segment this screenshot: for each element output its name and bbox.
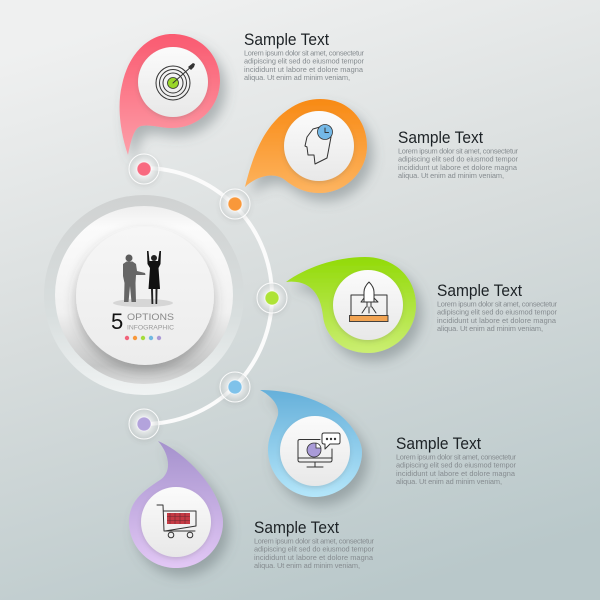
- text block: option 1: aliqua. Ut enim ad minim veniam,: [244, 73, 350, 82]
- icon: shopping cart: [157, 505, 196, 538]
- text block: option 1: Sample Text: [244, 30, 329, 49]
- five colour dots: [125, 336, 161, 340]
- node: green: [257, 283, 287, 313]
- text block: option 2: aliqua. Ut enim ad minim veniam,: [398, 171, 504, 180]
- central circle hub: [44, 195, 244, 395]
- text block: option 2: Sample Text: [398, 128, 483, 147]
- text block: option 1: incididunt ut labore et dolore magna: [244, 65, 364, 74]
- number 5: 5: [111, 309, 123, 334]
- panel: green pin rocket: [286, 257, 416, 353]
- node: red: [129, 154, 159, 184]
- text block: option 5: adipiscing elit sed do eiusmod tempor: [254, 544, 375, 554]
- text block: option 4: [396, 434, 517, 486]
- text block: option 2: adipiscing elit sed do eiusmod tempor: [398, 154, 519, 164]
- text block: option 4: incididunt ut labore et dolore magna: [396, 469, 516, 478]
- text block: option 5: Sample Text: [254, 518, 339, 537]
- people silhouettes: [113, 251, 173, 307]
- text block: option 2: [398, 128, 519, 180]
- panel: purple pin cart: [129, 441, 223, 568]
- text block: option 1: adipiscing elit sed do eiusmod tempor: [244, 56, 365, 66]
- text block: option 4: adipiscing elit sed do eiusmod tempor: [396, 460, 517, 470]
- text block: option 5: [254, 518, 375, 570]
- icon: laptop with rocket: [350, 282, 388, 322]
- icon: monitor with pie and chat bubble: [298, 433, 340, 467]
- panel: orange pin head: [245, 99, 367, 193]
- text block: option 5: Lorem ipsum dolor sit amet, consectetur: [254, 536, 375, 546]
- text block: option 2: Lorem ipsum dolor sit amet, consectetur: [398, 146, 519, 156]
- text block: option 5: aliqua. Ut enim ad minim veniam,: [254, 561, 360, 570]
- text block: option 3: incididunt ut labore et dolore magna: [437, 316, 557, 325]
- icon: target with arrow: [156, 63, 195, 100]
- text block: option 3: aliqua. Ut enim ad minim veniam,: [437, 324, 543, 333]
- text block: option 4: Sample Text: [396, 434, 481, 453]
- icon: head with clock: [305, 124, 332, 164]
- text block: option 4: aliqua. Ut enim ad minim veniam,: [396, 477, 502, 486]
- text block: option 3: Lorem ipsum dolor sit amet, consectetur: [437, 300, 558, 308]
- text block: option 4: Lorem ipsum dolor sit amet, consectetur: [396, 452, 517, 462]
- text block: option 2: incididunt ut labore et dolore magna: [398, 163, 518, 172]
- options label: OPTIONS: [127, 312, 174, 323]
- text block: option 5: incididunt ut labore et dolore magna: [254, 553, 374, 562]
- panel: blue pin monitor: [260, 390, 362, 497]
- text block: option 3: [437, 281, 558, 333]
- text block: option 3: adipiscing elit sed do eiusmod tempor: [437, 308, 558, 316]
- connector arc: [144, 168, 272, 424]
- text block: option 1: Lorem ipsum dolor sit amet, consectetur: [244, 48, 365, 58]
- node: blue: [220, 372, 250, 402]
- text block: option 1: [244, 30, 365, 82]
- panel: red pin target: [120, 34, 220, 155]
- node: orange: [220, 189, 250, 219]
- infographic label: INFOGRAPHIC: [127, 324, 174, 332]
- text block: option 3: Sample Text: [437, 281, 522, 300]
- node: purple: [129, 409, 159, 439]
